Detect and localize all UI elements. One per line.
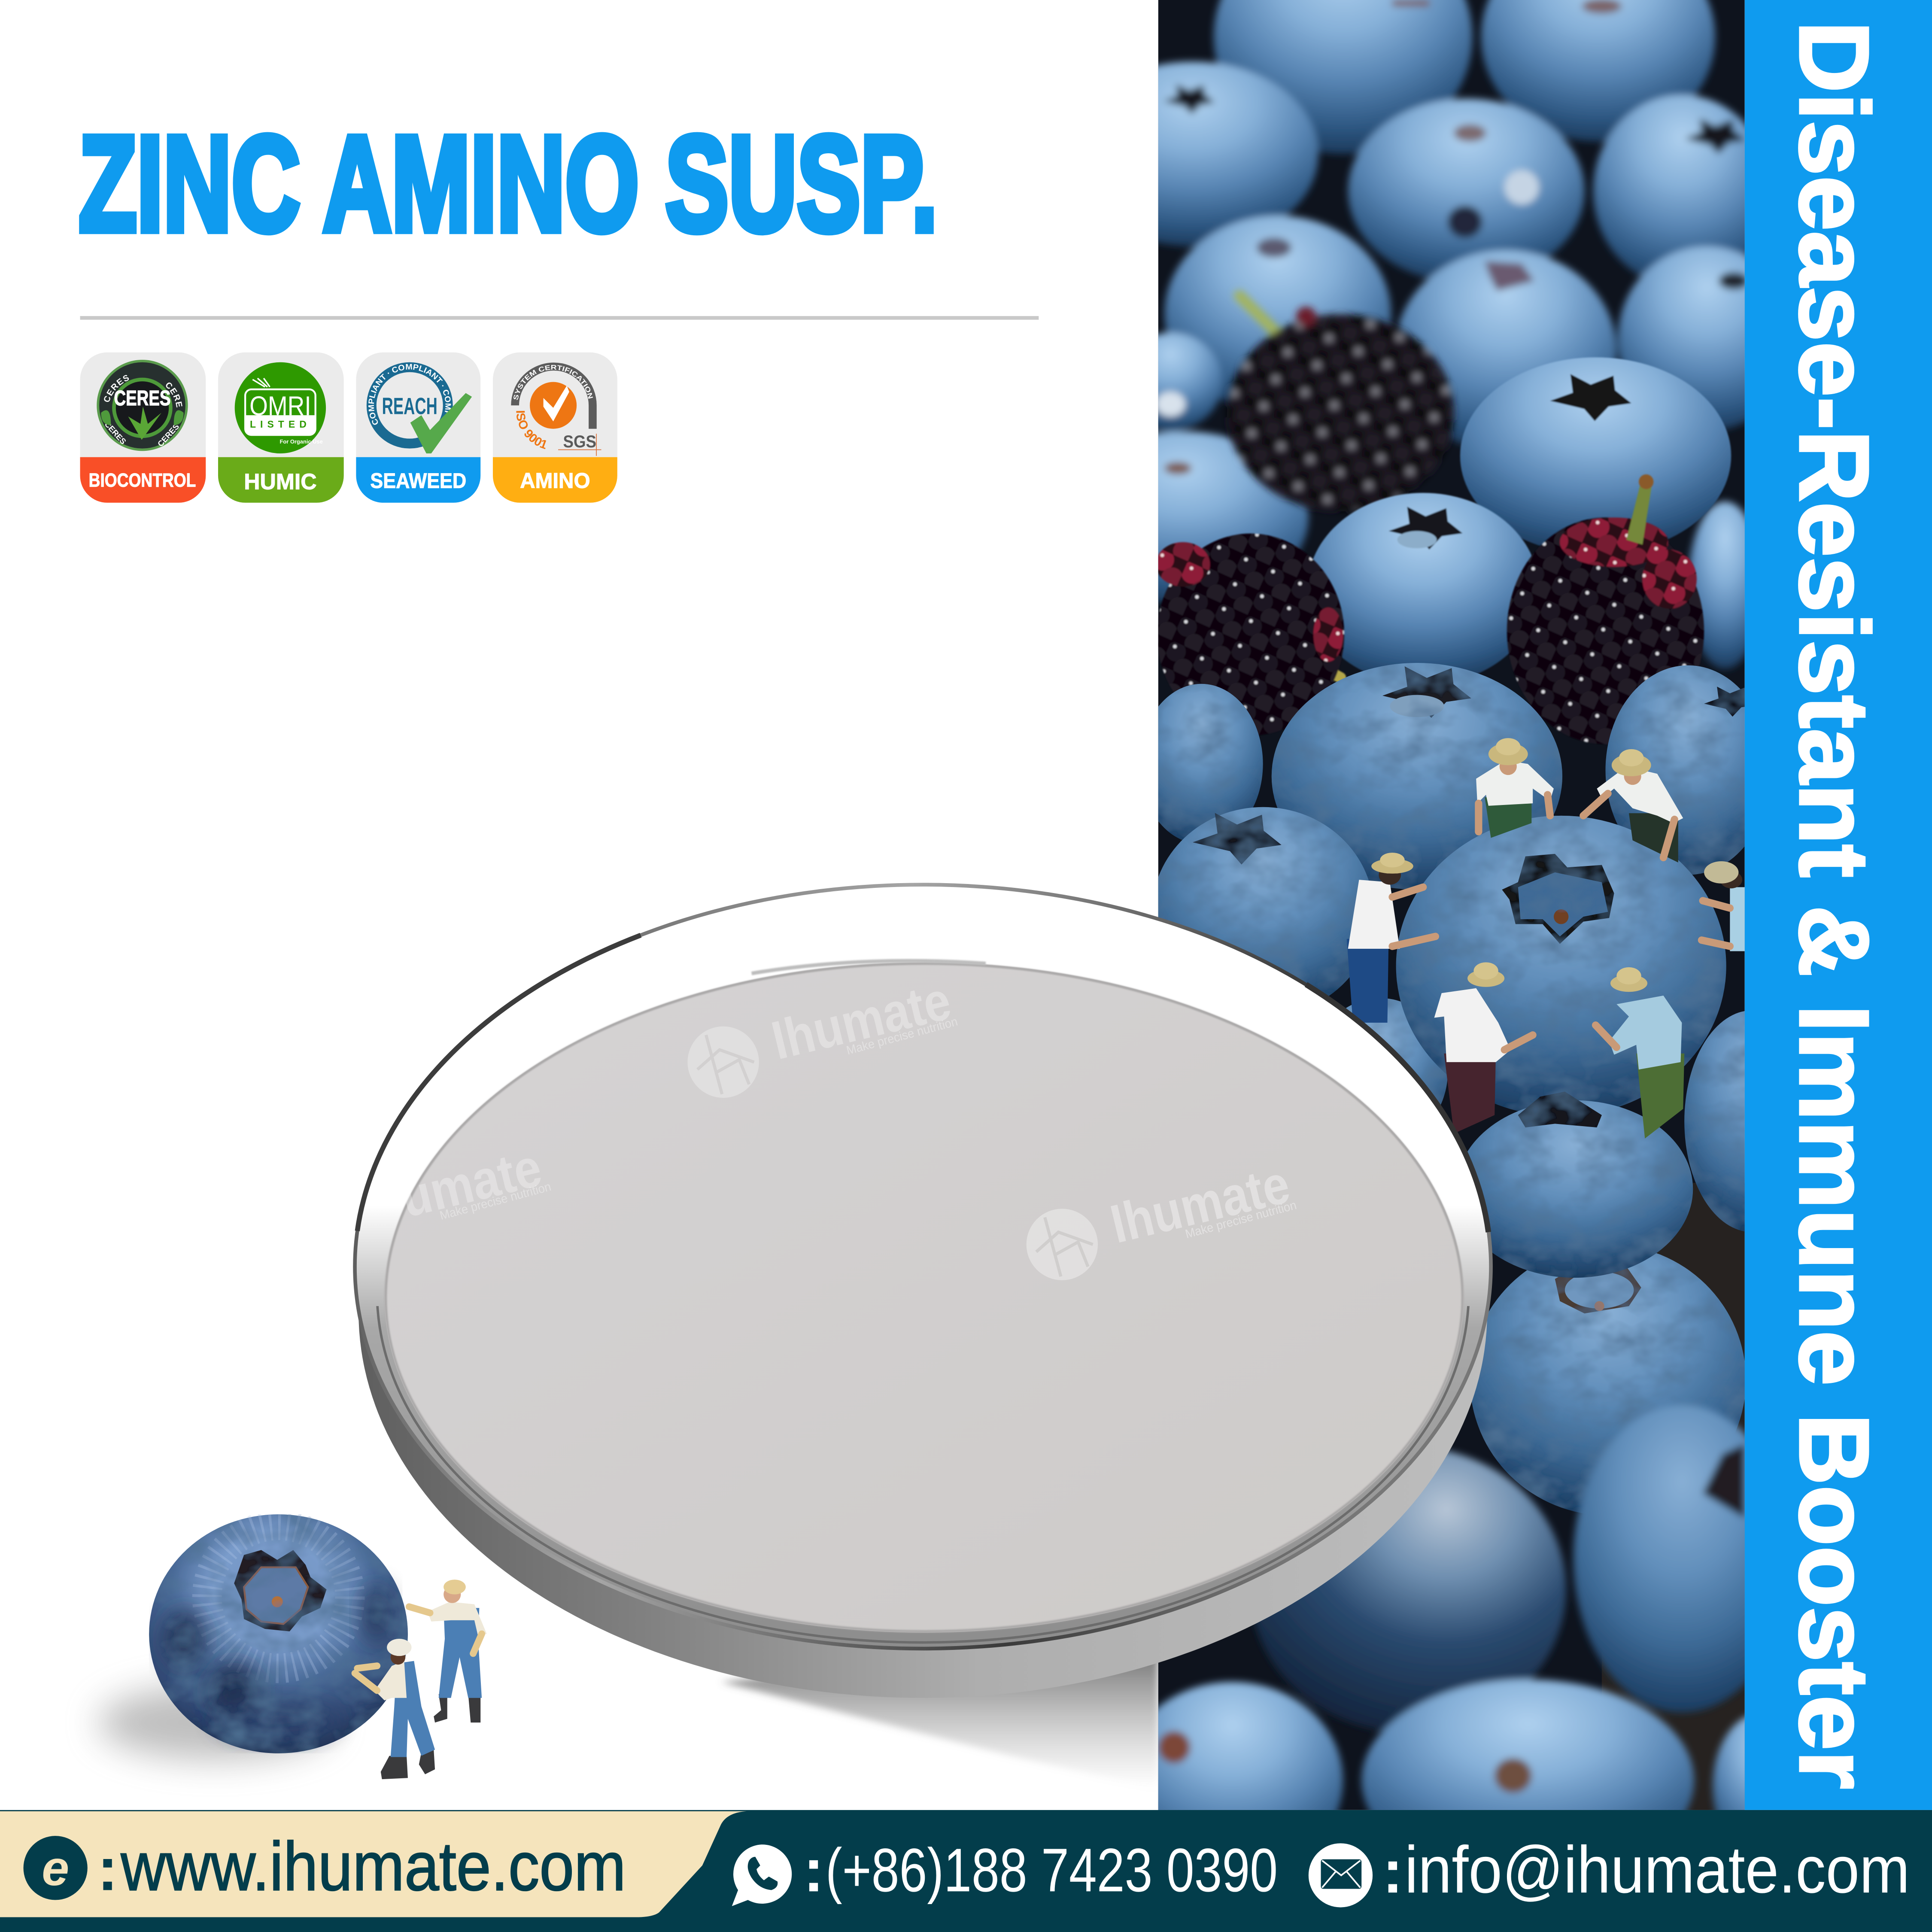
standing worker — [409, 1580, 487, 1722]
icon: mail — [1309, 1843, 1373, 1908]
badge: seaweed: COMPLIANT · COMPLIANT · COMPLIANT — [367, 362, 453, 441]
email text: : — [1382, 1837, 1403, 1906]
divider — [80, 316, 1039, 320]
badge: amino: ISO 9001 — [513, 410, 549, 452]
dish rim — [355, 885, 1491, 1649]
phone text: (+86)188 7423 0390 — [826, 1836, 1278, 1905]
worker figure 1 — [1476, 738, 1554, 838]
foreground blueberries — [1140, 663, 1820, 1232]
worker figure 4 — [1434, 962, 1533, 1133]
website text: : — [97, 1835, 118, 1903]
berry shadow — [99, 1686, 333, 1759]
out-of-focus bottom blueberries — [1121, 1405, 1811, 1881]
dish — [355, 885, 1491, 1698]
certification badges — [0, 0, 617, 503]
vertical slogan: Disease-Resistant & Immune Booster — [1779, 21, 1889, 1789]
blueberry centre row — [1307, 493, 1539, 685]
liquid edge shading — [386, 963, 1463, 1631]
badge: humic: OMRI — [249, 391, 311, 421]
blackberry upper left with stem — [1227, 296, 1454, 511]
small blueberry — [149, 1514, 408, 1753]
icon: whatsapp — [732, 1844, 792, 1906]
badge: amino: SYSTEM CERTIFICATION — [512, 364, 594, 401]
badge: seaweed — [356, 352, 480, 503]
worker figure 5 — [1596, 967, 1684, 1139]
watermark top: Make precise nutrition — [845, 1015, 959, 1057]
main blueberry with open calyx — [1396, 816, 1726, 1116]
badge: biocontrol: CERES — [103, 419, 128, 446]
blackberry lower left with stem — [1156, 534, 1344, 735]
footer cream website panel — [0, 1811, 747, 1917]
panel: blue side band — [1745, 0, 1932, 1810]
watermark top: Ihumate — [766, 970, 956, 1071]
badge: humic: For Organic Use — [279, 438, 323, 445]
icon: web: e — [42, 1841, 69, 1896]
background tone behind berries — [1602, 1183, 1745, 1810]
dish wall — [358, 927, 1487, 1698]
website text: www.ihumate.com — [120, 1828, 626, 1905]
badge: humic: LISTED — [250, 419, 311, 430]
badge: biocontrol: CERES — [102, 373, 131, 404]
phone text: : — [803, 1836, 824, 1905]
watermark right: Ihumate — [1105, 1153, 1295, 1255]
out-of-focus top blueberries — [1158, 0, 1745, 673]
dark glass edge upper right — [1306, 984, 1488, 1232]
watermark top — [687, 970, 959, 1098]
panel: blueberry photo — [1158, 0, 1745, 1810]
watermark left: umate — [395, 1137, 547, 1229]
dish lip line — [377, 942, 1469, 1643]
blackberry upper right with stem — [1507, 474, 1704, 744]
badge: biocontrol: CERES — [114, 387, 170, 410]
surface reflection — [752, 961, 986, 973]
dark glass edge upper left — [357, 935, 641, 1231]
badge: seaweed: REACH — [382, 393, 437, 419]
small blueberry scene — [99, 1514, 487, 1779]
icon: web — [24, 1836, 88, 1900]
badge: seaweed: SEAWEED — [370, 469, 466, 492]
badge: amino: AMINO — [520, 468, 590, 492]
badge: humic — [218, 352, 344, 503]
watermark right — [1027, 1153, 1298, 1280]
worker figure 3 — [1347, 853, 1435, 1023]
watermark left: Make precise nutrition — [438, 1180, 553, 1223]
badge: amino — [493, 352, 617, 503]
blueberry with star calyx — [1460, 357, 1731, 554]
worker figure 2 — [1583, 749, 1683, 863]
blueberry below main — [1456, 1092, 1746, 1516]
badge: amino: SGS — [563, 432, 596, 451]
worker figure 6 — [1701, 861, 1745, 951]
liquid surface — [384, 962, 1464, 1633]
badge: humic: HUMIC — [244, 469, 317, 494]
footer bar — [0, 1810, 1932, 1932]
badge: biocontrol: BIOCONTROL — [89, 470, 196, 491]
dish cast shadow — [721, 1633, 1158, 1789]
kneeling worker — [355, 1639, 435, 1779]
badge: biocontrol: CERES — [156, 422, 181, 448]
watermark right: Make precise nutrition — [1184, 1198, 1298, 1241]
title: ZINC AMINO SUSP. — [79, 108, 938, 259]
